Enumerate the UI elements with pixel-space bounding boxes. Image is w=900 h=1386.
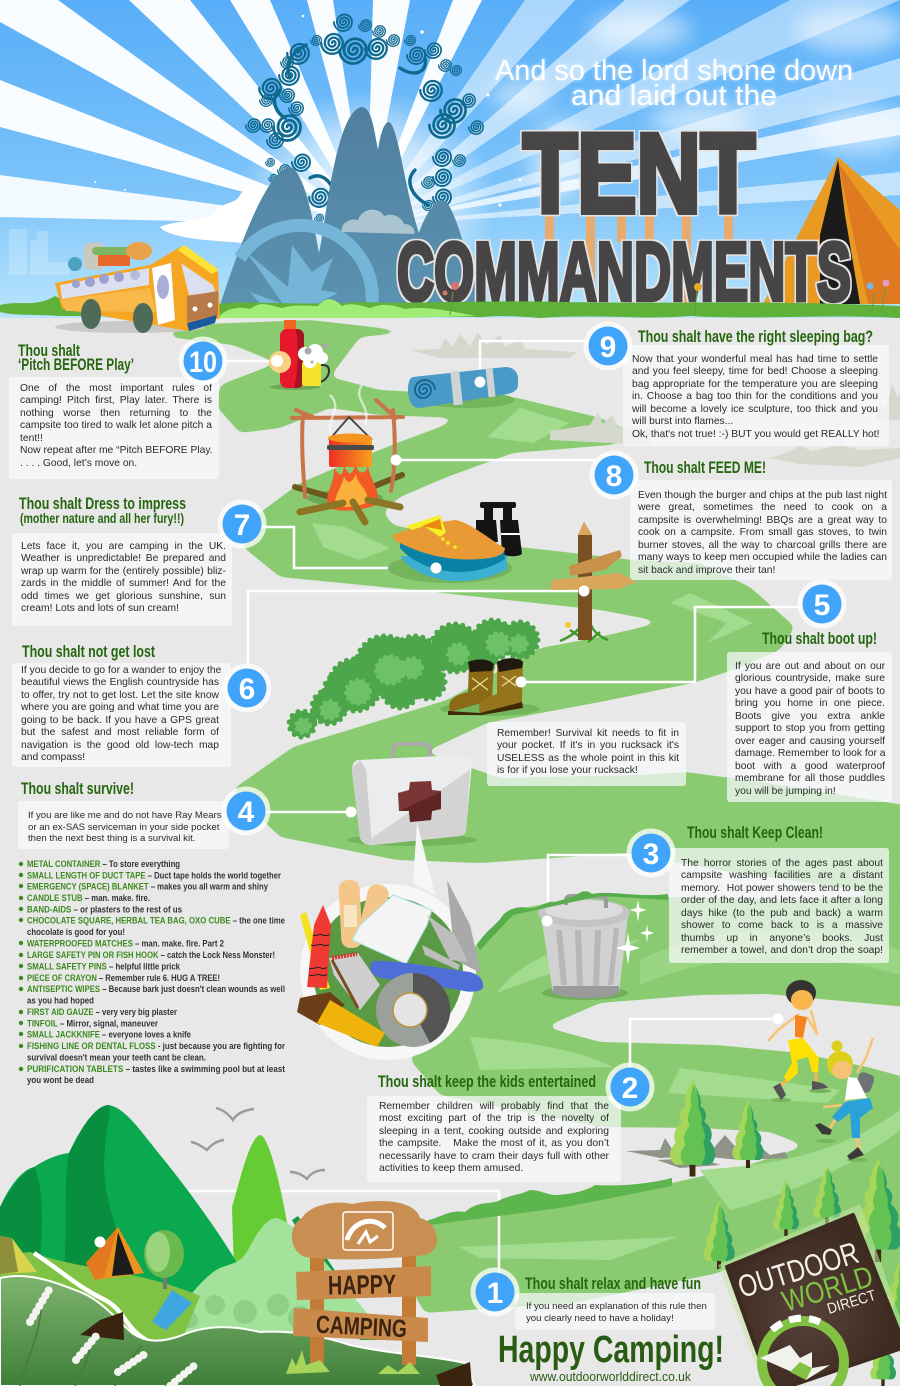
heading: rule 8: Thou shalt FEED ME! [644,459,766,477]
orange tent [86,1227,144,1280]
number badge 10: 10 [189,346,217,379]
flames [327,464,378,511]
dry grass tufts [410,332,900,467]
text panel: rule 5: support to stop you from getting [735,723,885,734]
text panel: rule 10: camping! Pitch first, Play later. There is [20,395,212,406]
top board [292,1201,437,1259]
survival kit list: SMALL JACKKNIFE – everyone loves a knife [27,1030,191,1041]
bottom left mountains and camp scene [0,1105,475,1386]
number badge 7 [218,500,266,548]
hiking boots [440,658,540,716]
text panel: rule 2: Remember children will probably find that the [379,1101,609,1112]
survival kit list: SMALL LENGTH OF DUCT TAPE – Duct tape holds the world together [27,870,281,881]
campfire with pot [292,385,403,522]
text panel: rule 2: activities to keep them amused. [379,1163,523,1174]
text panel: rule 2: most exciting part of the trip is the novelty of [379,1113,609,1124]
survival kit list: METAL CONTAINER – To store everything [27,859,180,870]
children hiking [768,980,876,1162]
text panel: rule 10: Now repeat after me “Pitch BEFORE Play. [20,445,213,456]
middle hill with path [0,1252,200,1345]
bushes [289,620,538,737]
wooden Happy Camping sign [286,1201,437,1374]
number badge 1: 1 [487,1277,503,1310]
sunburst rays [0,0,900,225]
survival kit list: CHOCOLATE SQUARE, HERBAL TEA BAG, OXO CUBE – the one time [27,916,285,927]
sky background [0,0,900,318]
tent top right [763,157,900,304]
text panel: rule 6: navigation is the good old low-tech map [21,740,219,751]
text panel: rule 10: One of the most important rules of [20,383,212,394]
crayons [300,905,331,990]
green bush line behind trash can [477,891,668,950]
heading: rule 7 [19,495,186,526]
CAMPING board [293,1308,428,1342]
text panel: rule 5: over eager and causing yourself [735,736,885,747]
Outdoor World Direct logo badge [718,1204,900,1386]
green bush line across lower road [425,1178,672,1225]
Outdoor World Direct logo badge: DIRECT [825,1287,878,1318]
wooden signpost [550,522,637,642]
text panel: rule 10 [9,377,219,479]
heading: rule 7: Thou shalt Dress to impress [19,495,186,513]
text panel: rule 6: to offer, try not to get lost. Let the site know [21,690,219,701]
folded clothes and binoculars [388,502,522,583]
survival kit list: FIRST AID GAUZE – very very big plaster [27,1007,177,1018]
chocolate bar [297,992,385,1047]
birds [191,1108,325,1179]
jackknife [370,880,483,992]
clouds on the right of the sky [490,8,900,200]
pot [329,417,372,440]
bottle and mug [269,320,329,390]
callout: survival kit reminder: USELESS as the whole point in this kit [497,753,679,764]
text panel: rule 2: sleeping in a tent, cooking outside and exploring [379,1126,609,1137]
text panel: rule 4: then the next best thing is a survival kit. [28,833,195,844]
lavender flowers [20,1288,195,1386]
survival kit list: CANDLE STUB – man. make. fire. [27,893,150,904]
survival kit list: BAND-AIDS – or plasters to the rest of us [27,904,182,915]
posts [310,1255,324,1365]
survival kit list: you wont be dead [27,1075,94,1086]
gauze [352,895,432,964]
text panel: rule 8: campsite is overwhelming! BBQs are a great way to [638,515,887,526]
small yellow tent far left [0,1236,37,1274]
text panel: rule 6: and compass! [21,752,85,763]
steam [330,385,367,438]
survival kit list: ANTISEPTIC WIPES – Because bark just doesn't clean wounds as well [27,984,285,995]
wooden Happy Camping sign: HAPPY [328,1269,396,1301]
text panel: rule 8: were great, sometimes the need to cook on a [638,502,887,513]
number badge 9: 9 [600,331,616,364]
heading: rule 7: (mother nature and all her fury!!) [20,510,184,526]
heading: rule 3: Thou shalt Keep Clean! [687,824,823,842]
number badge 2 [606,1062,654,1112]
text panel: rule 9: Ok, that's not true! :-) BUT you would get REALLY hot! [632,429,880,440]
text panel: rule 8: many ways to keep men occupied while the ladies can [638,552,887,563]
grass at post feet [286,1350,330,1374]
zoom pointer and survival kit circle [297,822,483,1060]
pine trees [670,1078,900,1386]
bus [55,242,220,333]
number badge 3 [626,828,676,878]
number badge 2: 2 [622,1072,638,1105]
text panel: rule 1: you clearly need to have a holiday! [526,1313,674,1324]
text panel: rule 8: burner stoves, all the way to charcoal grills there are [638,540,887,551]
text panel: rule 7: Weather is unpredictable! Be prepared and [21,553,226,564]
number badge 7: 7 [234,509,250,542]
number badge 1 [470,1268,520,1316]
text panel: rule 1: If you need an explanation of this rule then [526,1301,707,1312]
text panel: rule 9: and you feel sleepy, time for bed! Choose a sleeping [632,366,878,377]
number badge 3: 3 [643,838,659,871]
number badge 9 [584,322,632,370]
text panel: rule 7: zards in the middle of summer! And for the [21,578,226,589]
text panel: rule 10: tent!! [20,433,43,444]
survival kit list: WATERPROOFED MATCHES – man. make. fire. Part 2 [27,939,224,950]
text panel: rule 4 [18,801,229,849]
matches [329,953,380,1010]
number badge 10 [178,336,228,386]
heading: rule 1: Thou shalt relax and have fun [525,1275,701,1293]
text panel: rule 6: If you decide to go for a wander to enjoy the [21,665,221,676]
heading: rule 10: ‘Pitch BEFORE Play’ [18,356,134,374]
Outdoor World Direct logo badge: OUTDOOR [734,1235,863,1305]
text panel: rule 8: sit back and improve their tan! [638,565,775,576]
survival kit list: SMALL SAFETY PINS – helpful little prick [27,961,181,972]
luggage on roof [68,242,152,271]
callout: survival kit reminder [487,722,686,786]
text panel: rule 2 [367,1096,621,1182]
text panel: rule 5: glorious countryside, make sure [735,673,885,684]
city skyline [9,229,70,275]
white footpath [34,1253,150,1342]
text panel: rule 3: thumbs up in anyone’s books. Just [681,933,883,944]
survival kit list: PIECE OF CRAYON – Remember rule 6. HUG A TREE! [27,973,220,984]
Outdoor World Direct logo badge: WORLD [778,1260,877,1319]
survival kit list: PURIFICATION TABLETS – tastes like a swimming pool but at least [27,1064,286,1075]
heading: rule 10 [18,342,134,374]
text panel: rule 6 [12,663,231,767]
trash can with sparkles [538,896,654,1000]
wooden posts under TENT [545,210,733,305]
text panel: rule 9: Now that your wonderful meal has had time to settle [632,354,878,365]
number badge 5 [798,580,846,628]
text panel: rule 9 [623,345,889,446]
heading: rule 10: Thou shalt [18,342,80,360]
child two [815,1038,876,1162]
website address: www.outdoorworlddirect.co.uk [529,1369,691,1384]
number badge 4: 4 [238,796,255,829]
red cross [398,781,441,822]
text panel: rule 9: will burst into flames... [632,416,733,427]
text panel: rule 2: the campsite. Make the most of it, as you don’t [379,1138,609,1149]
plant at base [560,620,608,642]
small cloud [342,210,415,234]
subtitle: And so the lord shone down [495,55,853,87]
text panel: rule 3: days hike (to the pub and back) a warm [681,908,883,919]
survival kit list: EMERGENCY (SPACE) BLANKET – makes you all warm and shiny [27,882,269,893]
survival kit list: TINFOIL – Mirror, signal, maneuver [27,1018,158,1029]
text panel: rule 5 [727,652,892,802]
text panel: rule 3: The horror stories of the ages past about [681,858,883,869]
road highlights [312,408,900,1260]
text panel: rule 6: going to be back. If you have a GPS great [21,715,219,726]
blue tent [152,1290,192,1330]
text panel: rule 4: If you are like me and do not have Ray Mears [28,810,222,821]
text panel: rule 6: beautiful views the English countryside has [21,677,219,688]
sleeping bag [408,367,518,408]
text panel: rule 5: boot with a good waterproof [735,761,885,772]
grass strip [0,280,900,318]
text panel: rule 3: order of the day, and lets face it after a long [681,895,883,906]
heading: rule 6: Thou shalt not get lost [22,643,155,661]
text panel: rule 4: or an ex-SAS serviceman in your side pocket [28,822,219,833]
connector lines [100,341,822,1292]
round tree [144,1230,184,1289]
title word TENT: TENT [523,111,755,236]
heading: rule 2: Thou shalt keep the kids entertained [378,1073,596,1091]
text panel: rule 2: necessarily have to cram their days full with other [379,1151,609,1162]
first aid kit [347,744,477,846]
text panel: rule 7: cream! Lots and lots of sun cream! [21,603,179,614]
text panel: rule 7: wrap up warm for the (entirely possible) bliz- [21,566,226,577]
text panel: rule 5: Boots give you extra ankle [735,711,885,722]
wooden Happy Camping sign: CAMPING [315,1311,408,1343]
foreground hill [0,1276,475,1386]
callout: survival kit reminder: your pocket. If it's in you rucksack it's [497,740,679,751]
text panel: rule 5: If you are out and about on our [735,661,885,672]
text panel: rule 5: you will be jumping in! [735,786,836,797]
text panel: rule 5: bring you home in one piece. [735,698,885,709]
text panel: rule 6: where you are going and what time you are [21,702,219,713]
compass watermark on mountain [240,225,372,303]
number badge 4 [222,786,270,836]
text panel: rule 5: membrane for all those puddles [735,773,885,784]
mountains [219,107,482,312]
binoculars [476,502,522,556]
text panel: rule 9: will become a lovely ice sculpture, too thick and you [632,404,878,415]
text panel: rule 10: nothing worse then returning to the [20,408,212,419]
compass mark in logo [760,1318,844,1386]
duct tape [376,973,450,1047]
child one [768,980,831,1102]
callout: survival kit reminder: is for if you lose your rucksack! [497,765,638,776]
text panel: rule 3: memory. Hot power showers tend to be the [681,883,883,894]
survival kit list: as you had hoped [27,996,94,1007]
white floating specks [94,15,521,207]
survival kit list: FISHING LINE OR DENTAL FLOSS - just because you are fighting for [27,1041,285,1052]
text panel: rule 9: in. Choose a bag too thin for the conditions and you [632,391,878,402]
survival kit list: chocolate is good for you! [27,927,125,938]
text panel: rule 7: odd times we get glorious sunshine, sun [21,591,226,602]
survival kit list: LARGE SAFETY PIN OR FISH HOOK – catch the Lock Ness Monster! [27,950,275,961]
survival kit list: survival doesn't mean your teeth cant be clean. [27,1052,206,1063]
connector end dots [94,355,784,1248]
text panel: rule 5: damage. Remember to look for a [735,748,886,759]
logs [300,500,400,522]
subtitle: and laid out the [571,80,777,112]
sign-off: Happy Camping: Happy Camping! [498,1329,724,1371]
text panel: rule 3: campsite washing facilities are a distant [681,870,883,881]
HAPPY board [296,1266,431,1300]
text panel: rule 3 [669,848,889,963]
text panel: rule 10: campsite too tired to walk let alone pitch a [20,420,212,431]
survival kit list [19,859,286,1086]
text panel: rule 9: bag appropriate for the temperature you are sleeping [632,379,878,390]
swirl arch around mountain [246,14,483,222]
logo on top board [343,1212,393,1250]
number badge 6 [222,664,272,712]
text panel: rule 8: Even though the burger and chips at the pub last night [638,490,887,501]
number badge 8 [590,450,638,500]
text panel: rule 8 [630,480,892,580]
text panel: rule 8: cook on a campsite. From small gas stoves, to twin [638,527,887,538]
white cloud behind mountain [160,185,270,245]
heading: rule 4: Thou shalt survive! [21,780,134,798]
text panel: rule 5: you have a good pair of boots to [735,686,885,697]
text panel: rule 1 [515,1293,715,1330]
number badge 6: 6 [239,673,255,706]
callout: survival kit reminder: Remember! Survival kit needs to fit in [497,728,679,739]
number badge 5: 5 [814,589,830,622]
list bullets [19,862,23,1071]
small flowers at title foot [442,280,890,315]
text panel: rule 3: shower to come back to is a massive [681,920,883,931]
dark stumps [80,1312,124,1340]
number badge 8: 8 [606,460,622,493]
text panel: rule 7 [12,533,232,626]
plasters [338,879,390,948]
winding green road [168,320,900,1320]
text panel: rule 7: Lets face it, you are camping in the UK. [21,541,226,552]
text panel: rule 6: but the safest and most reliable form of [21,727,219,738]
text panel: rule 10: . . . . Good, let’s move on. [20,458,137,469]
text panel: rule 3: remember a towel, and don’t drop the soap! [681,945,883,956]
